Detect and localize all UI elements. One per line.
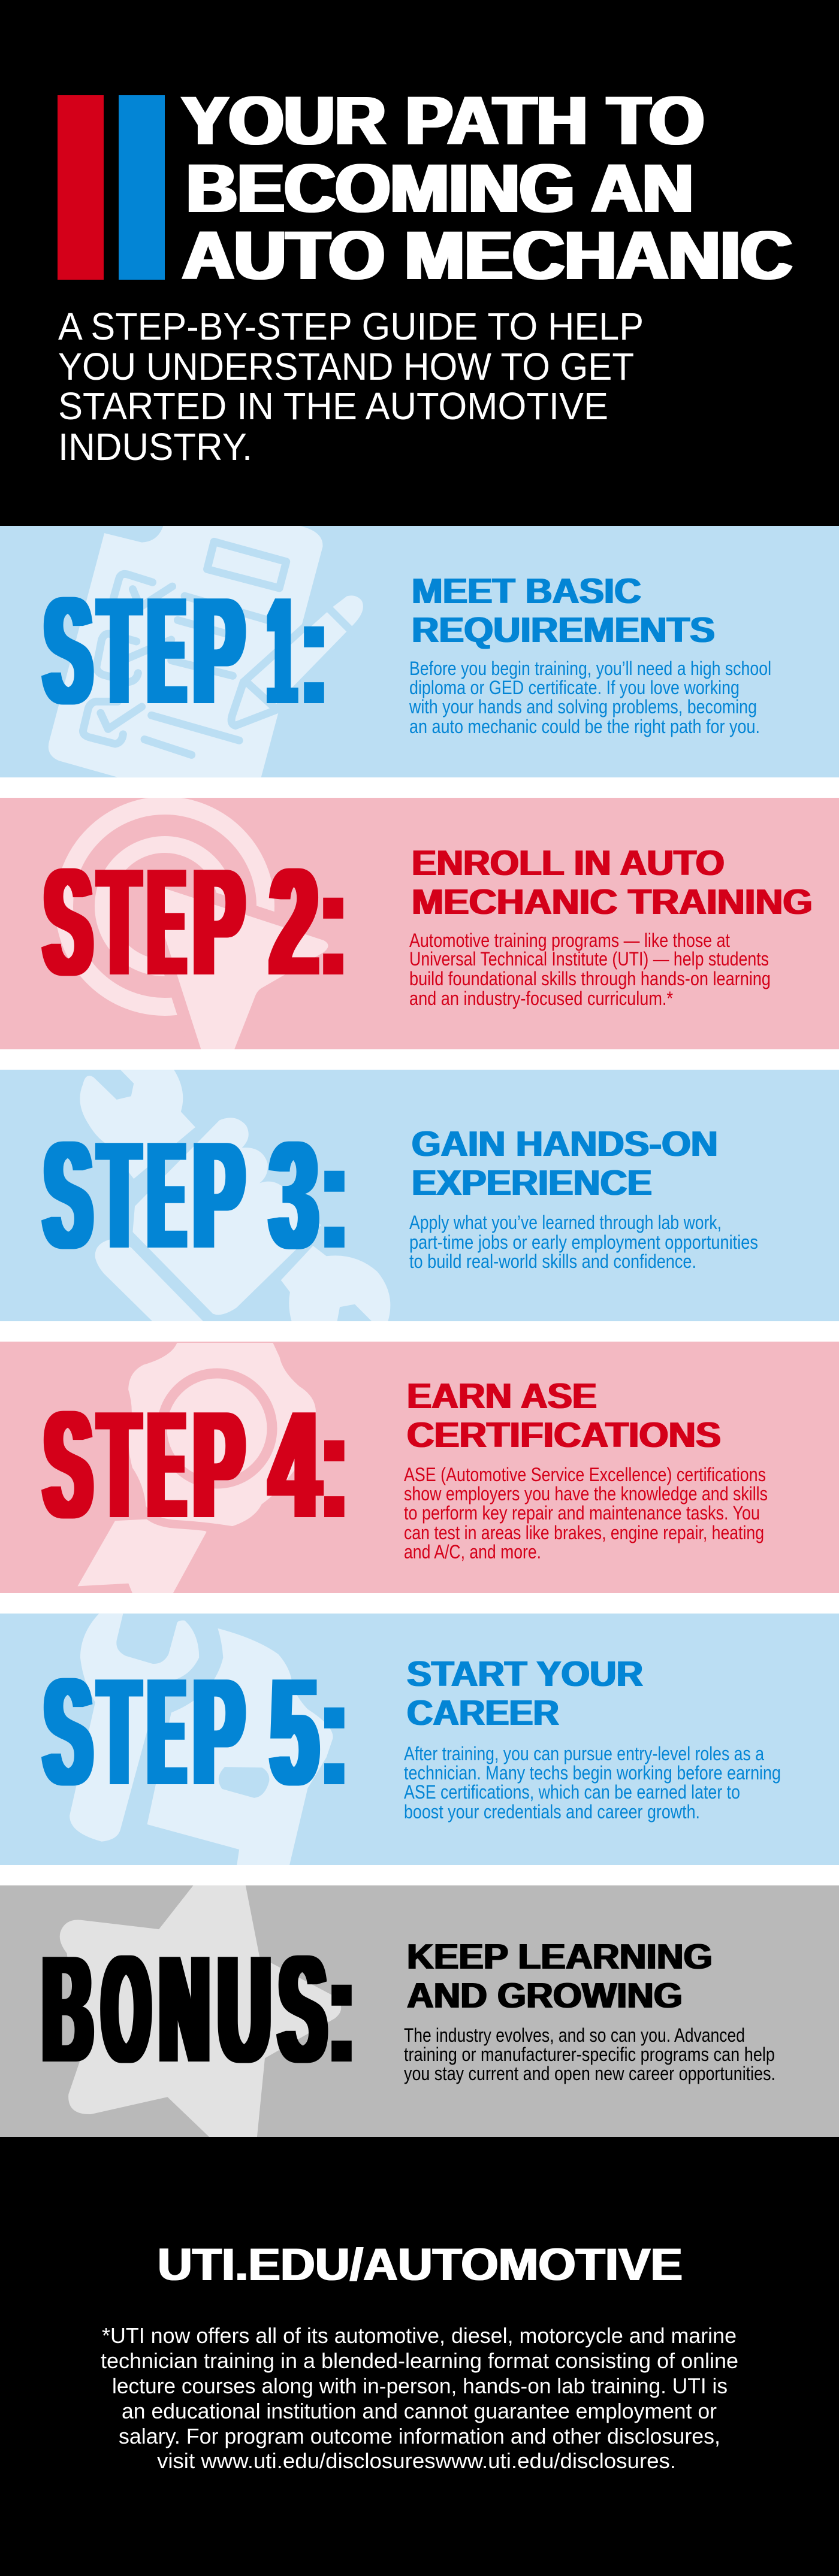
icon: target and cursor <box>64 806 328 1054</box>
body text: and A/C, and more. <box>404 1541 541 1563</box>
step label: S <box>44 1110 92 1280</box>
body text: you stay current and open new career opportunities. <box>404 2063 775 2084</box>
title: BECOMING AN <box>186 150 693 227</box>
step label: O <box>102 1924 150 2094</box>
title <box>182 83 792 294</box>
panel: bonus <box>0 1883 839 2139</box>
heading: EXPERIENCE <box>412 1163 652 1203</box>
step label: E <box>149 1110 185 1280</box>
body text: Automotive training programs — like those at <box>409 930 730 951</box>
title: AUTO MECHANIC <box>182 217 792 294</box>
subtitle: YOU UNDERSTAND HOW TO GET <box>58 345 634 388</box>
step label: P <box>194 565 242 735</box>
footnote: an educational institution and cannot guarantee employment or <box>122 2399 717 2423</box>
step label: T <box>99 1379 139 1549</box>
step label: E <box>149 1379 185 1549</box>
step label: T <box>99 1110 139 1280</box>
panel: step 4 <box>0 1339 839 1597</box>
subtitle: A STEP-BY-STEP GUIDE TO HELP <box>58 305 644 348</box>
panel: step 3 <box>0 1070 839 1321</box>
footnote: lecture courses along with in-person, hands-on lab training. UTI is <box>112 2374 728 2398</box>
panel: header <box>0 0 839 526</box>
panel: step 3: : <box>322 1110 347 1280</box>
body text: to perform key repair and maintenance tasks. You <box>404 1502 760 1524</box>
panel: step 4: : <box>322 1379 347 1549</box>
step label: E <box>149 565 185 735</box>
panel: bonus: : <box>329 1924 354 2094</box>
icon: blue stripe <box>119 95 165 280</box>
panel: step 5: : <box>322 1646 347 1817</box>
step label: T <box>99 837 139 1007</box>
panel: step 2 <box>0 798 839 1054</box>
step label: S <box>44 565 92 735</box>
heading: START YOUR <box>407 1654 643 1694</box>
body text: can test in areas like brakes, engine repair, heating <box>404 1522 764 1543</box>
heading: REQUIREMENTS <box>412 610 715 650</box>
body text: After training, you can pursue entry-level roles as a <box>404 1743 764 1764</box>
body text <box>404 2024 775 2084</box>
body text: boost your credentials and career growth. <box>404 1801 700 1823</box>
subtitle <box>58 305 644 468</box>
body text: show employers you have the knowledge and skills <box>404 1483 768 1505</box>
heading: CERTIFICATIONS <box>407 1415 721 1455</box>
step label: P <box>194 837 242 1007</box>
subtitle: STARTED IN THE AUTOMOTIVE <box>58 385 608 428</box>
icon: wrench and hand <box>70 1614 333 1867</box>
body text: diploma or GED certificate. If you love working <box>409 677 740 698</box>
body text: technician. Many techs begin working before earning <box>404 1762 781 1784</box>
body text: Before you begin training, you’ll need a high school <box>409 658 771 679</box>
panel: step 5 <box>0 1614 839 1867</box>
body text: ASE certifications, which can be earned later to <box>404 1781 740 1803</box>
heading: MEET BASIC <box>412 571 641 611</box>
step label: S <box>44 837 92 1007</box>
website url: UTI.EDU/AUTOMOTIVE <box>158 2239 683 2290</box>
subtitle: INDUSTRY. <box>58 425 252 468</box>
body text: build foundational skills through hands-on learning <box>409 968 771 989</box>
body text: Apply what you’ve learned through lab work, <box>409 1212 722 1233</box>
heading: KEEP LEARNING <box>407 1937 713 1976</box>
heading: MECHANIC TRAINING <box>412 882 813 922</box>
heading: AND GROWING <box>407 1976 683 2015</box>
step label: E <box>149 837 185 1007</box>
body text: training or manufacturer-specific programs can help <box>404 2044 775 2065</box>
icon: star <box>60 1883 341 2139</box>
body text <box>409 930 771 1009</box>
step label: S <box>279 1924 326 2094</box>
heading: GAIN HANDS-ON <box>412 1124 718 1164</box>
panel: step 1 <box>0 526 839 777</box>
step label: 1 <box>268 565 295 735</box>
body text <box>409 1212 758 1272</box>
step label: 2 <box>270 837 318 1007</box>
heading <box>407 1937 713 2015</box>
step label: E <box>149 1646 185 1817</box>
body text: an auto mechanic could be the right path for you. <box>409 716 760 737</box>
body text: The industry evolves, and so can you. Advanced <box>404 2024 745 2046</box>
body text <box>404 1464 768 1563</box>
title: YOUR PATH TO <box>182 83 704 159</box>
step label: T <box>99 565 139 735</box>
step label: B <box>43 1924 92 2094</box>
footnote <box>101 2323 738 2473</box>
body text: ASE (Automotive Service Excellence) certifications <box>404 1464 766 1485</box>
panel: footer <box>0 2137 839 2576</box>
body text <box>409 658 771 737</box>
footnote: salary. For program outcome information and other disclosures, <box>119 2424 720 2448</box>
heading: EARN ASE <box>407 1376 597 1416</box>
step label: U <box>218 1924 270 2094</box>
icon: red stripe <box>58 95 104 280</box>
step label: S <box>44 1646 92 1817</box>
heading <box>412 843 813 922</box>
step label: T <box>99 1646 139 1817</box>
heading <box>412 1124 718 1203</box>
step label: 5 <box>271 1646 318 1817</box>
footnote: *UTI now offers all of its automotive, diesel, motorcycle and marine <box>102 2323 737 2348</box>
body text: to build real-world skills and confidence. <box>409 1251 696 1272</box>
panel: step 2: : <box>321 837 346 1007</box>
panel: step 1: : <box>301 565 327 735</box>
heading <box>407 1376 721 1455</box>
body text: and an industry-focused curriculum.* <box>409 988 673 1009</box>
body text <box>404 1743 781 1823</box>
step label: 4 <box>270 1379 319 1549</box>
step label: 3 <box>270 1110 318 1280</box>
step label: N <box>159 1924 209 2094</box>
step label: P <box>194 1379 242 1549</box>
footnote: visit www.uti.edu/disclosureswww.uti.edu/disclosures. <box>157 2448 676 2473</box>
heading <box>407 1654 643 1733</box>
icon: clipboard and pencil <box>49 526 367 777</box>
step label: P <box>194 1646 242 1817</box>
body text: part-time jobs or early employment opportunities <box>409 1231 758 1253</box>
icon: award ribbon <box>77 1339 320 1597</box>
footnote: technician training in a blended-learning format consisting of online <box>101 2348 738 2373</box>
heading <box>412 571 715 650</box>
step label: P <box>194 1110 242 1280</box>
heading: CAREER <box>407 1693 559 1733</box>
icon: crossed wrench and hand <box>80 1070 390 1321</box>
body text: with your hands and solving problems, becoming <box>409 696 757 718</box>
heading: ENROLL IN AUTO <box>412 843 725 883</box>
body text: Universal Technical Institute (UTI) — help students <box>409 948 769 970</box>
step label: S <box>44 1379 92 1549</box>
